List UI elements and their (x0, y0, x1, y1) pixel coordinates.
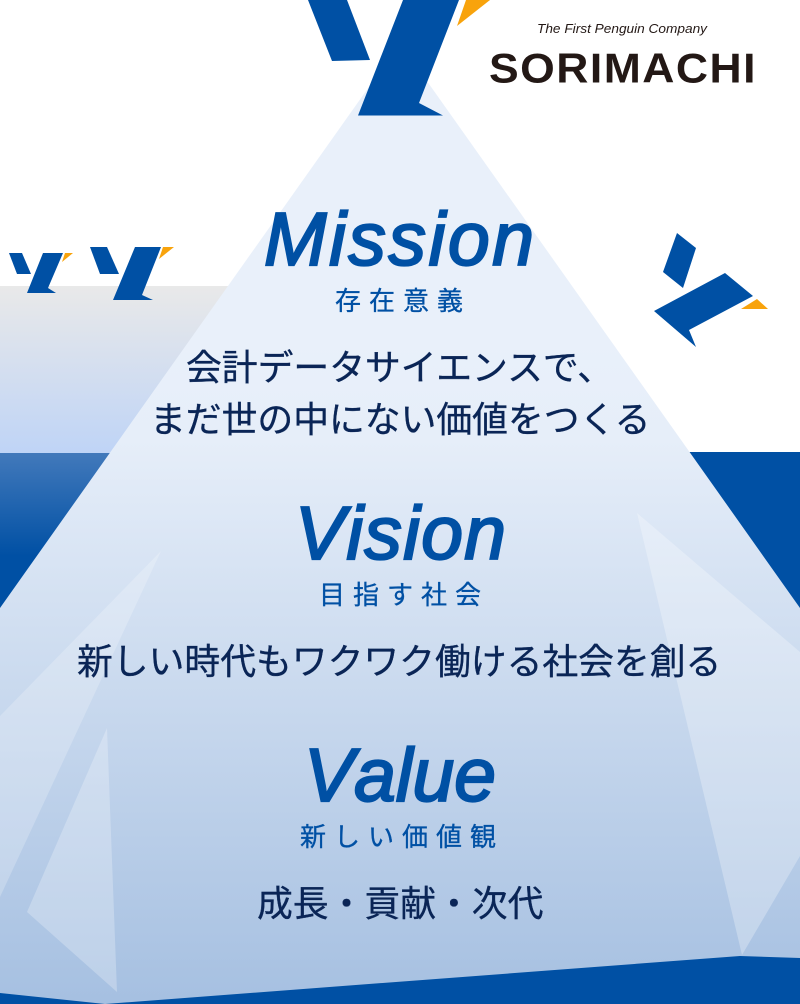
background: right sea (400, 452, 800, 612)
text: Mission statement: 会計データサイエンスで、 (186, 348, 613, 388)
logo wordmark: SORIMACHI (489, 46, 757, 92)
icon: large penguin at summit (308, 0, 490, 116)
subheading: Vision: 目指す社会 (319, 580, 489, 610)
text: Mission statement: まだ世の中にない価値をつくる (150, 400, 650, 440)
icon: small penguin left (9, 253, 73, 293)
text: Mission statement (150, 348, 650, 440)
background: left sky (0, 286, 400, 453)
facet: left small (27, 728, 117, 992)
heading: Mission: Mission (264, 197, 534, 281)
subheading: Value: 新しい価値観 (300, 822, 504, 852)
background: left sea (0, 453, 400, 613)
heading: Value: Value (304, 733, 496, 817)
facet: left large (0, 551, 161, 897)
icon: diving penguin right (654, 233, 768, 347)
heading: Vision: Vision (295, 491, 506, 575)
text: Value statement: 成長・貢献・次代 (257, 884, 543, 924)
bottom water band (0, 950, 800, 1004)
logo (489, 22, 757, 92)
logo tagline: The First Penguin Company (537, 22, 708, 36)
facet: right large (637, 513, 800, 955)
icon: small penguin middle (90, 247, 174, 300)
subheading: Mission: 存在意義 (335, 286, 471, 316)
text: Vision statement: 新しい時代もワクワク働ける社会を創る (77, 642, 721, 682)
